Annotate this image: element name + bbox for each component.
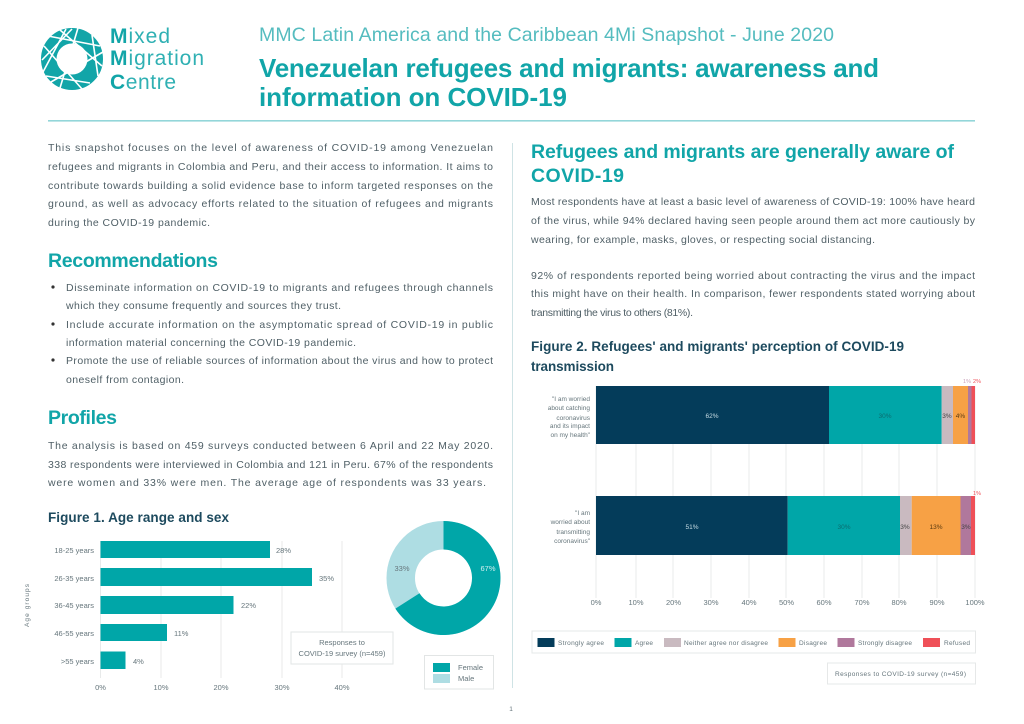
callout: responses: [291, 632, 393, 664]
bar chart: age range: 40%: [334, 683, 350, 692]
right column heading: Refugees and migrants are generally aware of: [531, 141, 954, 163]
figure 2 title: Figure 2. Refugees' and migrants' perception of COVID-19: [531, 339, 904, 354]
awareness text: wearing, for example, masks, gloves, or respecting social distancing.: [530, 234, 875, 246]
profiles text: The analysis is based on 459 surveys conducted between 6 April and 22 May 2020.: [48, 440, 493, 452]
bar chart: age range: 11%: [174, 629, 189, 638]
bar: worried about transmitting: 13%: [929, 524, 943, 531]
bar chart: age range: >55 years: [61, 657, 94, 666]
legend: agreement scale: Strongly agree: [558, 640, 604, 647]
legend: agreement scale: Neither agree nor disagree: [684, 640, 768, 647]
bar chart: age range: 46-55 years: [54, 629, 94, 638]
icon: ring emblem: [42, 28, 103, 89]
donut chart: sex: 67%: [480, 564, 496, 573]
profiles text: were women and 33% were men. The average age of respondents was 33 years.: [47, 477, 486, 489]
page number: 1: [509, 706, 513, 713]
x axis labels: 10%: [628, 598, 644, 607]
awareness text: Most respondents have at least a basic level of awareness of COVID-19: 100% have heard: [531, 196, 975, 208]
bar: worried about catching: [596, 379, 981, 444]
profiles text: [47, 440, 493, 489]
right column heading: [531, 141, 954, 187]
intro text: This snapshot focuses on the level of awareness of COVID-19 among Venezuelan: [48, 142, 493, 154]
main title: [259, 53, 879, 112]
x axis labels: 50%: [779, 598, 794, 607]
donut chart: sex: 33%: [394, 564, 410, 573]
logo wordmark: [110, 25, 204, 94]
x axis labels: 0%: [591, 598, 602, 607]
callout: responses: Responses to: [319, 638, 365, 647]
legend: agreement scale: [532, 631, 976, 653]
bar chart: age range: 10%: [153, 683, 169, 692]
stacked bar chart: perception of transmission: [548, 379, 985, 607]
bar chart: age range: 18-25 years: [54, 546, 94, 555]
intro text: contribute towards building a solid evidence base to inform targeted responses on the: [48, 180, 493, 192]
bar chart: age range: 0%: [95, 683, 106, 692]
bar chart: age range: 20%: [213, 683, 229, 692]
bar: worried about transmitting: 1%: [973, 491, 981, 497]
category labels: transmitting: [556, 529, 590, 536]
x axis labels: 20%: [666, 598, 681, 607]
heading: Profiles: Profiles: [48, 407, 117, 429]
intro text: refugees and migrants in Colombia and Peru, and their access to information. It aims to: [48, 161, 493, 173]
profiles text: 338 respondents were interviewed in Colombia and 121 in Peru. 67% of the respondents: [48, 459, 493, 471]
category labels: "I am worried: [552, 396, 590, 403]
bar chart: age range: [24, 541, 350, 692]
bar chart: age range: 28%: [276, 546, 291, 555]
legend: agreement scale: Disagree: [799, 640, 827, 647]
bar: worried about transmitting: [596, 491, 981, 555]
recommendations list: Disseminate information on COVID-19 to migrants and refugees through channels: [66, 282, 493, 294]
awareness text: this might have on their health. In comparison, fewer respondents stated worrying about: [531, 288, 975, 300]
category labels: and its impact: [550, 423, 590, 430]
category labels: [548, 396, 591, 545]
category labels: coronavirus: [556, 415, 591, 422]
main title: Venezuelan refugees and migrants: awareness and: [259, 53, 879, 83]
donut legend: Female: [458, 663, 483, 672]
bar: worried about catching: 2%: [973, 379, 981, 385]
awareness text: of the virus, while 94% declared having seen people around them act more cautiously by: [531, 215, 976, 227]
callout: responses to survey: [828, 663, 976, 684]
figure 2 title: transmission: [531, 359, 614, 374]
x axis labels: [591, 598, 985, 607]
recommendations list: [51, 282, 493, 386]
category labels: worried about: [550, 519, 590, 526]
recommendations list: information material concerning the COVID-19 pandemic.: [66, 337, 356, 349]
legend: agreement scale: Agree: [635, 640, 653, 647]
donut legend: [424, 656, 494, 689]
awareness text: transmitting the virus to others (81%).: [531, 307, 693, 319]
heading: Recommendations: Recommendations: [48, 250, 218, 272]
bar chart: age range: 35%: [319, 574, 334, 583]
x axis labels: 90%: [929, 598, 945, 607]
callout: responses: COVID-19 survey (n=459): [299, 649, 386, 658]
bar: worried about catching: 62%: [705, 413, 719, 420]
bar: worried about catching: 3%: [942, 413, 952, 420]
awareness text: [530, 196, 976, 319]
bar: worried about catching: 4%: [956, 413, 965, 420]
logo: Mixed Migration Centre: [42, 25, 204, 94]
main title: information on COVID-19: [259, 82, 567, 112]
bar chart: age range: 4%: [133, 657, 144, 666]
header subtitle: MMC Latin America and the Caribbean 4Mi Snapshot - June 2020: [259, 24, 834, 46]
x axis labels: 60%: [816, 598, 832, 607]
bar: worried about catching: 30%: [878, 413, 892, 420]
recommendations list: which they consume frequently and sources they trust.: [65, 300, 341, 312]
bar chart: age range: 22%: [241, 601, 256, 610]
x axis labels: 70%: [854, 598, 870, 607]
logo wordmark: Mixed: [110, 25, 170, 48]
bar: worried about transmitting: 3%: [961, 524, 971, 531]
bar: worried about transmitting: 3%: [900, 524, 910, 531]
bar chart: age range: 30%: [274, 683, 290, 692]
intro text: [48, 142, 493, 229]
legend: agreement scale: Refused: [944, 640, 970, 647]
figure 1 title: Figure 1. Age range and sex: [48, 510, 229, 525]
category labels: coronavirus": [554, 538, 591, 545]
bar chart: age range: 26-35 years: [54, 574, 94, 583]
category labels: about catching: [548, 405, 590, 412]
figure 2 title: [531, 339, 904, 374]
logo wordmark: Migration: [110, 47, 204, 70]
donut chart: sex: [394, 521, 500, 635]
x axis labels: 40%: [741, 598, 757, 607]
category labels: "I am: [575, 510, 590, 517]
awareness text: 92% of respondents reported being worried about contracting the virus and the impact: [531, 270, 975, 282]
logo wordmark: Centre: [110, 71, 176, 94]
bar: worried about transmitting: 30%: [837, 524, 851, 531]
recommendations list: Include accurate information on the asymptomatic spread of COVID-19 in public: [66, 319, 493, 331]
age axis title: Age groups: [24, 583, 31, 627]
bar chart: age range: 36-45 years: [54, 601, 94, 610]
x axis labels: 30%: [703, 598, 719, 607]
legend: agreement scale: Strongly disagree: [858, 640, 912, 647]
bar: worried about catching: 1%: [963, 379, 971, 385]
right column heading: COVID-19: [531, 165, 624, 187]
x axis labels: 100%: [965, 598, 985, 607]
recommendations list: Promote the use of reliable sources of information about the virus and how to protect: [66, 355, 493, 367]
recommendations list: oneself from contagion.: [66, 374, 184, 386]
intro text: ground, as well as advocacy efforts related to the situation of refugees and migrants: [48, 198, 493, 210]
bar: worried about transmitting: 51%: [685, 524, 699, 531]
category labels: on my health": [550, 432, 591, 439]
intro text: during the COVID-19 pandemic.: [48, 217, 210, 229]
x axis labels: 80%: [891, 598, 907, 607]
callout: responses to survey: Responses to COVID-19 survey (n=459): [835, 671, 966, 678]
donut legend: Male: [458, 674, 474, 683]
